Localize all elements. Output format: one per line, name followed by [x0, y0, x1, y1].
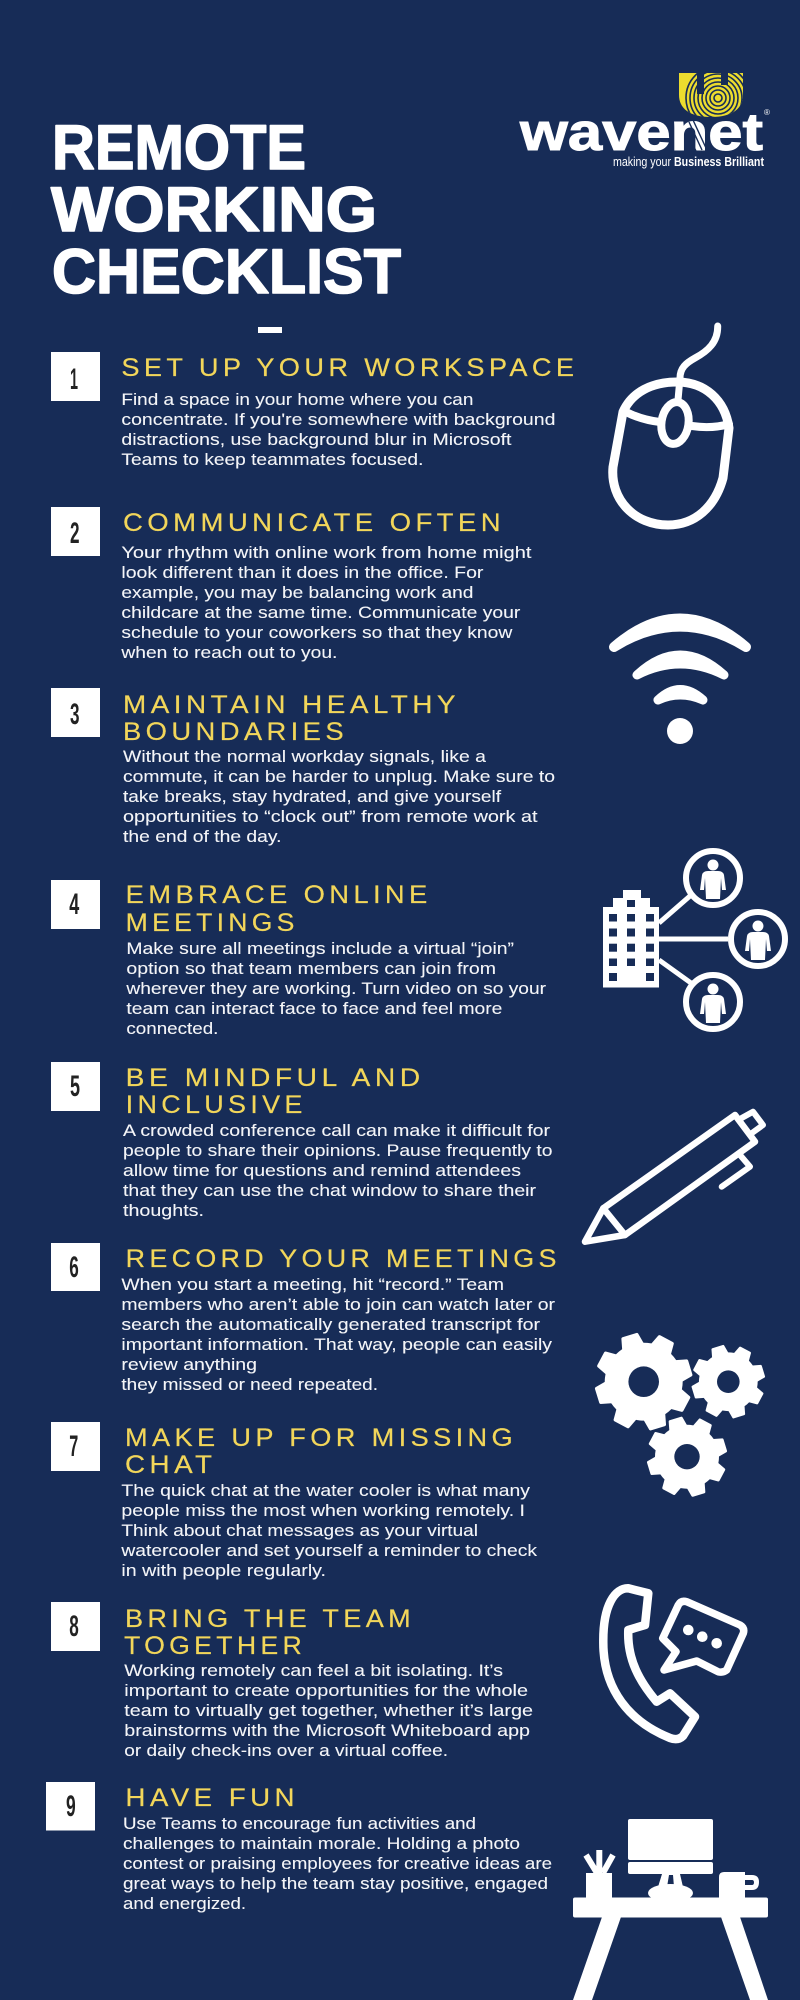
heading 9: HAVE FUN — [125, 1784, 299, 1812]
logo registered mark: ® — [764, 108, 770, 117]
body text 4: Make sure all meetings include a virtual “join” — [126, 939, 514, 958]
icon: phone with speech bubble — [603, 1588, 744, 1739]
number box 1 — [51, 352, 100, 401]
body text 2: childcare at the same time. Communicate your — [121, 603, 521, 622]
body text 3 — [123, 747, 555, 846]
icon: desk with computer — [573, 1819, 768, 2000]
body text 1: Teams to keep teammates focused. — [121, 450, 423, 469]
step 5: be mindful and inclusive — [51, 1062, 552, 1220]
body text 4 — [125, 939, 546, 1038]
heading 7: CHAT — [125, 1451, 216, 1479]
heading 6: RECORD YOUR MEETINGS — [126, 1245, 561, 1273]
body text 2: schedule to your coworkers so that they know — [121, 623, 513, 642]
step 7: make up for missing chat — [51, 1422, 538, 1580]
title dash — [258, 327, 282, 333]
body text 5: that they can use the chat window to share their — [123, 1181, 536, 1200]
heading 2: COMMUNICATE OFTEN — [123, 509, 505, 537]
heading 5: INCLUSIVE — [126, 1091, 307, 1119]
number box 2 — [51, 507, 100, 556]
bubble dots — [683, 1625, 722, 1649]
monitor — [628, 1819, 713, 1902]
heading 7: MAKE UP FOR MISSING — [125, 1424, 517, 1452]
body text 7: watercooler and set yourself a reminder to check — [120, 1541, 538, 1560]
body text 2: Your rhythm with online work from home might — [121, 543, 532, 562]
title: REMOTE — [52, 113, 306, 183]
body text 1: distractions, use background blur in Microsoft — [121, 430, 512, 449]
logo tagline: making your Business Brilliant — [613, 154, 765, 169]
heading 4 — [126, 881, 432, 937]
body text 4: connected. — [126, 1019, 218, 1038]
number box 9: 9 — [66, 1790, 76, 1823]
body text 6: review anything — [121, 1355, 257, 1374]
number box 6: 6 — [69, 1251, 79, 1284]
body text 8: important to create opportunities for the whole — [124, 1681, 528, 1700]
body text 5: allow time for questions and remind attendees — [123, 1161, 521, 1180]
body text 5: thoughts. — [123, 1201, 204, 1220]
person top — [686, 851, 740, 905]
number box 3: 3 — [70, 698, 80, 731]
body text 2: when to reach out to you. — [120, 643, 337, 662]
large gear — [583, 1321, 705, 1443]
building — [603, 890, 659, 988]
body text 9: great ways to help the team stay positive, engaged — [123, 1874, 548, 1893]
person bottom — [686, 975, 740, 1029]
number box 6 — [51, 1243, 100, 1291]
body text 4: team can interact face to face and feel more — [126, 999, 502, 1018]
body text 8: team to virtually get together, whether it’s large — [124, 1701, 533, 1720]
number box 4: 4 — [69, 888, 79, 921]
body text 7: Think about chat messages as your virtual — [121, 1521, 478, 1540]
number box 1: 1 — [70, 363, 78, 396]
icon: pen — [585, 1112, 763, 1242]
heading 3: MAINTAIN HEALTHY — [123, 691, 460, 719]
body text 3: take breaks, stay hydrated, and give yourself — [123, 787, 501, 806]
number box 3 — [51, 688, 100, 737]
heading 8: TOGETHER — [124, 1632, 306, 1660]
body text 9: challenges to maintain morale. Holding a photo — [123, 1834, 520, 1853]
step 9: have fun — [46, 1782, 552, 1913]
number box 7 — [51, 1422, 100, 1471]
heading 3: BOUNDARIES — [123, 718, 348, 746]
body text 2: look different than it does in the office. For — [121, 563, 484, 582]
body text 2 — [120, 543, 532, 662]
icon: office building connected to people — [603, 851, 785, 1029]
body text 4: wherever they are working. Turn video on so your — [125, 979, 546, 998]
number box 4 — [51, 880, 100, 929]
heading 1: SET UP YOUR WORKSPACE — [121, 354, 578, 382]
body text 6: search the automatically generated transcript for — [121, 1315, 540, 1334]
body text 8: Working remotely can feel a bit isolating. It’s — [124, 1661, 503, 1680]
icon: wifi signal — [614, 618, 746, 744]
step 3: maintain healthy boundaries — [51, 688, 555, 846]
body text 9: contest or praising employees for creative ideas are — [123, 1854, 552, 1873]
heading 4: EMBRACE ONLINE — [126, 881, 432, 909]
title: CHECKLIST — [52, 237, 401, 307]
body text 8: brainstorms with the Microsoft Whiteboard app — [124, 1721, 530, 1740]
body text 3: commute, it can be harder to unplug. Make sure to — [123, 767, 555, 786]
body text 9 — [123, 1814, 552, 1913]
logo stripes on the letter n — [686, 120, 706, 151]
icon: computer mouse — [613, 326, 729, 525]
icon: gears — [583, 1321, 774, 1507]
logo: wavenet — [519, 66, 770, 169]
logo mark: yellow fingerprint U — [679, 73, 743, 117]
pen cup — [586, 1850, 613, 1898]
medium gear — [682, 1336, 774, 1428]
mug — [719, 1872, 759, 1898]
body text 1: Find a space in your home where you can — [121, 390, 473, 409]
heading 5 — [126, 1064, 425, 1119]
body text 3: Without the normal workday signals, like a — [123, 747, 487, 766]
connector lines — [659, 896, 728, 983]
number box 8: 8 — [69, 1610, 79, 1643]
body text 7: The quick chat at the water cooler is what many — [121, 1481, 531, 1500]
table legs — [573, 1917, 768, 2000]
body text 6: important information. That way, people can easily — [121, 1335, 553, 1354]
number box 7: 7 — [69, 1430, 78, 1463]
body text 5: A crowded conference call can make it difficult for — [123, 1121, 550, 1140]
body text 4: option so that team members can join from — [126, 959, 496, 978]
body text 6: When you start a meeting, hit “record.” Team — [121, 1275, 504, 1294]
body text 5: people to share their opinions. Pause frequently to — [123, 1141, 552, 1160]
body text 6 — [121, 1275, 555, 1394]
body text 7 — [120, 1481, 538, 1580]
heading 4: MEETINGS — [126, 909, 299, 937]
logo wordmark: wavenet — [519, 103, 763, 162]
heading 7 — [125, 1424, 517, 1479]
step 1: set up your workspace — [51, 352, 578, 469]
step 2: communicate often — [51, 507, 532, 662]
number box 2: 2 — [70, 517, 80, 550]
body text 5 — [123, 1121, 552, 1220]
body text 2: example, you may be balancing work and — [121, 583, 473, 602]
heading 3 — [123, 691, 460, 746]
number box 8 — [51, 1602, 100, 1651]
person right — [731, 912, 785, 966]
body text 3: opportunities to “clock out” from remote work at — [123, 807, 538, 826]
body text 3: the end of the day. — [123, 827, 282, 846]
step 4: embrace online meetings — [51, 880, 546, 1038]
heading 5: BE MINDFUL AND — [126, 1064, 425, 1092]
number box 5 — [51, 1062, 100, 1111]
body text 1 — [121, 390, 555, 469]
heading 8 — [124, 1605, 415, 1660]
bottom gear — [637, 1407, 737, 1507]
body text 8: or daily check-ins over a virtual coffee. — [124, 1741, 448, 1760]
body text 1: concentrate. If you're somewhere with background — [121, 410, 555, 429]
body text 7: people miss the most when working remotely. I — [121, 1501, 525, 1520]
title — [51, 113, 401, 307]
table top — [573, 1898, 768, 1918]
body text 8 — [124, 1661, 533, 1760]
title: WORKING — [51, 175, 377, 245]
number box 9 — [46, 1782, 95, 1830]
step 6: record your meetings — [51, 1243, 561, 1394]
step 8: bring the team together — [51, 1602, 533, 1760]
number box 5: 5 — [70, 1070, 80, 1103]
body text 9: and energized. — [123, 1894, 246, 1913]
body text 6: members who aren’t able to join can watch later or — [121, 1295, 555, 1314]
heading 8: BRING THE TEAM — [125, 1605, 415, 1633]
handset — [603, 1588, 695, 1739]
body text 9: Use Teams to encourage fun activities and — [123, 1814, 476, 1833]
body text 7: in with people regularly. — [121, 1561, 326, 1580]
speech bubble — [663, 1601, 744, 1672]
body text 6: they missed or need repeated. — [121, 1375, 378, 1394]
